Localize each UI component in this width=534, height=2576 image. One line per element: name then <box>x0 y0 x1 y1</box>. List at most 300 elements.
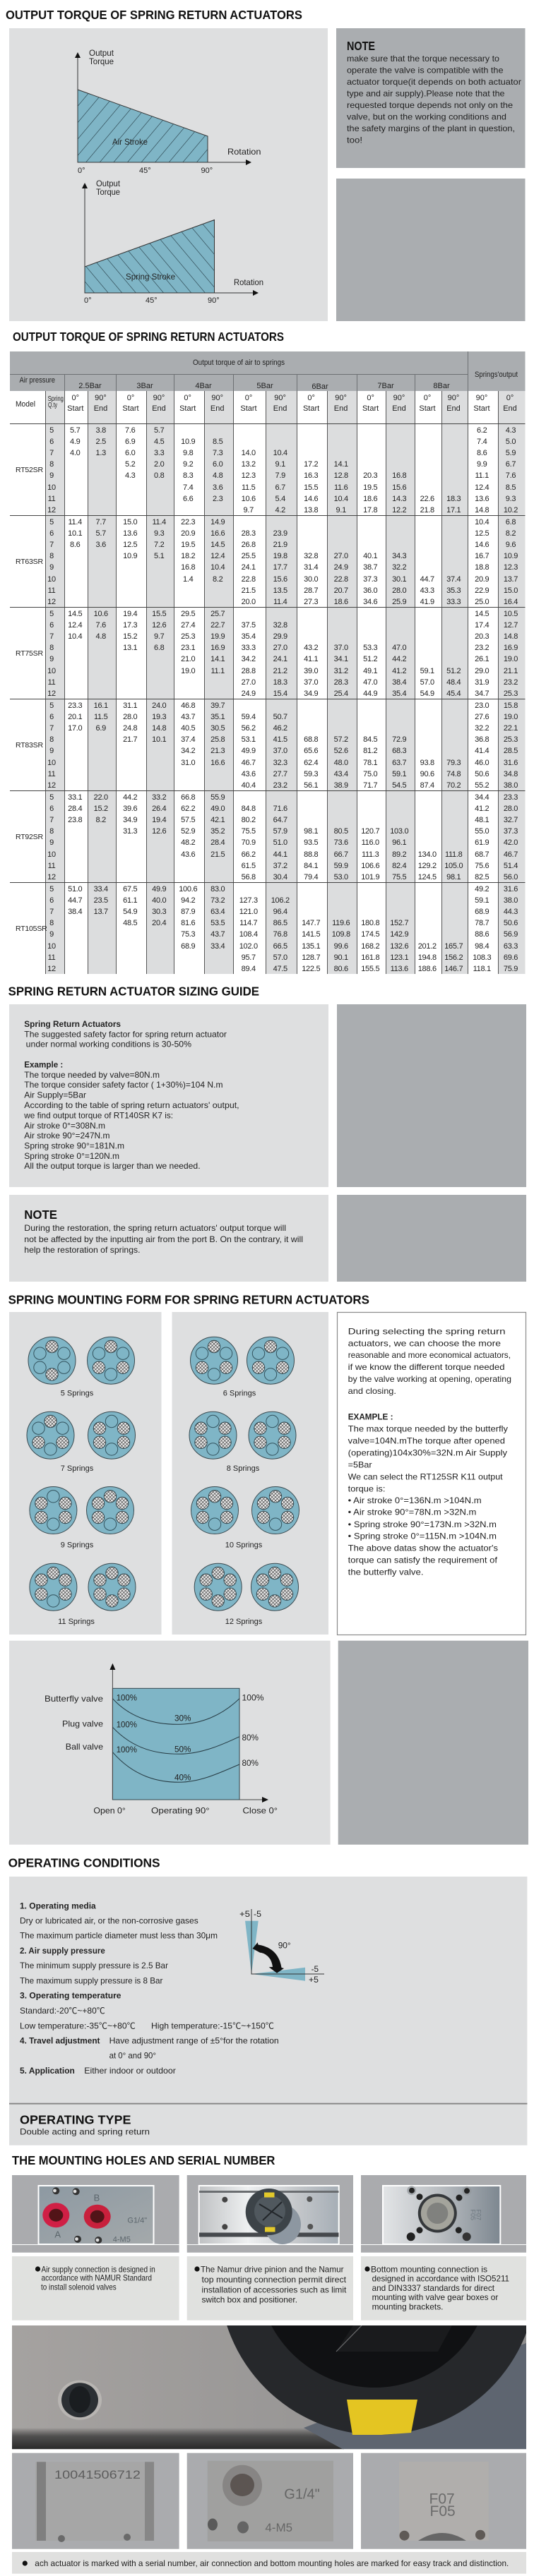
arrow: torque axis <box>112 1668 113 1800</box>
caption: bottom mounting connection <box>361 2256 526 2321</box>
caption: serial number note <box>12 2552 526 2574</box>
table rows: RT52SR: 6.2 <box>477 426 487 435</box>
table rows: RT83SR: 81.2 <box>363 747 377 755</box>
table rows: RT52SR: 9.7 <box>244 506 254 514</box>
table rows: RT52SR: 5.9 <box>506 449 516 457</box>
table rows: RT75SR: 17.3 <box>123 621 137 630</box>
table column captions: End <box>334 404 348 413</box>
table rows: RT63SR: 3.6 <box>96 541 106 549</box>
table rows: RT63SR: 8.6 <box>70 541 80 549</box>
table column captions: End <box>392 404 406 413</box>
table rows: RT92SR: 62.2 <box>181 805 195 813</box>
table rows: RT52SR: 7.4 <box>477 438 487 446</box>
table rows: RT92SR: 101.9 <box>361 873 379 881</box>
table rows: RT83SR: 70.2 <box>446 781 461 790</box>
table rows: RT52SR: 18.3 <box>446 495 461 503</box>
table rows: RT83SR: 23.0 <box>475 702 489 710</box>
table rows: RT75SR: 15.5 <box>152 610 166 618</box>
panel: valve selection text: the butterfly valve. <box>348 1567 424 1577</box>
table rows: RT92SR: 82.5 <box>475 873 489 881</box>
diagram: 6 springs <box>191 1337 294 1398</box>
table rows: RT75SR: 25.3 <box>504 690 518 698</box>
table rows: RT52SR: 20.3 <box>363 471 377 480</box>
table rows: RT63SR: 14.9 <box>210 518 225 526</box>
table rows: RT63SR: 9 <box>49 563 54 572</box>
table rows: RT52SR: 6.0 <box>125 449 135 457</box>
diagram: 8 springs <box>189 1412 296 1473</box>
table rows: RT92SR: 116.0 <box>362 838 379 847</box>
caption: serial number note: ach actuator is marked with a serial number, air connection and bottom mounting holes are marked for easy track and distinction. <box>35 2558 509 2568</box>
table rows: RT83SR: 37.0 <box>273 747 287 755</box>
table rows: RT63SR: 38.7 <box>363 563 377 572</box>
panel: sizing guide text: we find output torque of RT140SR K7 is: <box>23 1111 173 1121</box>
table rows: RT52SR: 18.6 <box>363 495 377 503</box>
table rows: RT63SR: 13.5 <box>273 586 287 595</box>
table rows: RT83SR: 25.8 <box>210 735 225 744</box>
table rows: RT105SR: 53.5 <box>210 919 225 927</box>
table rows: RT92SR: 57.5 <box>181 816 195 824</box>
table column captions: 0° <box>184 394 191 402</box>
table rows: RT92SR: 8 <box>49 827 54 836</box>
table rows: RT83SR: 63.7 <box>392 759 406 767</box>
panel: restoration note: help the restoration of springs. <box>24 1245 140 1255</box>
table rows: RT92SR: 64.7 <box>273 816 287 824</box>
table rows: RT75SR: 34.1 <box>334 655 348 663</box>
table rows: RT105SR: 127.3 <box>239 896 258 905</box>
table rows: RT52SR: 21.8 <box>420 506 434 514</box>
table rows: RT75SR: 48.4 <box>446 678 461 687</box>
table rows: RT83SR: 8 <box>49 735 54 744</box>
table rows: RT63SR: 12.4 <box>210 552 225 560</box>
diagram: 10 springs: 10 Springs <box>225 1541 263 1550</box>
table rows: RT92SR: 55.0 <box>475 827 489 836</box>
curve: butterfly valve <box>112 1699 239 1724</box>
table rows: RT83SR: 38.9 <box>334 781 348 790</box>
table rows: RT105SR: 108.3 <box>473 953 491 962</box>
table rows: RT105SR: 102.0 <box>239 942 258 951</box>
table rows: RT105SR: 118.1 <box>473 965 491 973</box>
table rows: RT52SR: 10.9 <box>181 438 195 446</box>
caption: namur drive pinion: switch box and positioner. <box>202 2295 297 2305</box>
table rows: RT92SR: 42.0 <box>504 838 518 847</box>
table rows: RT83SR: 23.3 <box>68 702 82 710</box>
panel: valve selection text: actuators, we can choose the more <box>348 1338 501 1348</box>
panel: note: valve, but on the working conditions and <box>347 112 506 121</box>
table rows: RT83SR: 39.7 <box>210 702 225 710</box>
table rows: RT63SR: 8 <box>49 552 54 560</box>
table rows: RT92SR: 106.6 <box>361 862 379 870</box>
table rows: RT92SR: 34.4 <box>475 793 489 802</box>
panel: valve selection text: torque is: <box>348 1483 385 1493</box>
table rows: RT92SR: 37.3 <box>504 827 518 836</box>
caption: namur drive pinion: top mounting connection permit direct <box>202 2275 347 2285</box>
table rows: RT92SR: 34.9 <box>123 816 137 824</box>
table rows: RT52SR: 16.3 <box>304 471 318 480</box>
table rows: RT83SR: 59.1 <box>392 770 406 778</box>
table rows: RT63SR: 32.2 <box>392 563 406 572</box>
table rows: RT92SR: 55.9 <box>210 793 225 802</box>
table rows: RT75SR: 17.4 <box>475 621 489 630</box>
table rows: RT83SR: 12 <box>47 781 56 790</box>
table rows: RT105SR: 83.0 <box>210 885 225 893</box>
table column captions: End <box>446 404 461 413</box>
panel: sizing guide text: Example : <box>24 1060 63 1070</box>
caption: bottom mounting connection: Bottom mounting connection is <box>371 2264 487 2274</box>
table rows: RT83SR: 6 <box>49 713 54 721</box>
caption: air supply connection <box>12 2256 179 2321</box>
table rows: RT52SR: 2.3 <box>213 495 222 503</box>
table rows: RT63SR: 23.9 <box>273 529 287 538</box>
table rows: RT63SR: 27.3 <box>304 598 318 606</box>
table rows: RT92SR: 33.2 <box>152 793 166 802</box>
table rows: RT83SR: 93.8 <box>420 759 434 767</box>
table rows: RT105SR: 10 <box>47 942 56 951</box>
table rows: RT83SR: 79.3 <box>446 759 461 767</box>
table rows: RT92SR: 82.4 <box>392 862 406 870</box>
table rows: RT63SR: 20.0 <box>242 598 256 606</box>
table rows: RT63SR: 44.7 <box>420 575 434 584</box>
table rows: RT92SR: 32.7 <box>504 816 518 824</box>
table rows: RT92SR: 30.4 <box>273 873 287 881</box>
text: operating type: OPERATING TYPE <box>20 2113 131 2127</box>
table rows: RT63SR: 24.1 <box>242 563 256 572</box>
panel: air connection mark photo <box>187 2453 353 2549</box>
table rows: RT75SR: 31.9 <box>475 678 489 687</box>
table rows: RT75SR: 57.0 <box>420 678 434 687</box>
table rows: RT105SR: 63.3 <box>504 942 518 951</box>
table rows: RT105SR: 100.6 <box>179 885 197 893</box>
table column captions: End <box>273 404 287 413</box>
table rows: RT92SR: RT92SR <box>16 833 43 841</box>
table rows: RT63SR: 13.7 <box>504 575 518 584</box>
panel: valve selection text: • Air stroke 90°=78N.m >32N.m <box>348 1507 476 1517</box>
table rows: RT75SR: 20.3 <box>475 632 489 641</box>
panel: valve selection text <box>338 1313 526 1635</box>
diagram: travel adjustment angle: -5 <box>254 1909 261 1919</box>
panel: note: the safety margins of the plant in question, <box>347 124 515 133</box>
table rows: RT52SR: 12.8 <box>334 471 348 480</box>
table rows: RT63SR: 22.8 <box>334 575 348 584</box>
table rows: RT52SR: 10.6 <box>242 495 256 503</box>
panel: bottom hole mark photo <box>361 2453 526 2549</box>
table rows: RT83SR: 46.2 <box>273 724 287 733</box>
table rows: RT63SR: 18.8 <box>475 563 489 572</box>
table rows: RT92SR: 10 <box>47 850 56 859</box>
table rows: RT92SR: 23.8 <box>68 816 82 824</box>
table rows: RT75SR: 5 <box>49 610 54 618</box>
table rows: RT83SR: 21.7 <box>123 735 137 744</box>
table rows: RT105SR: 99.6 <box>334 942 348 951</box>
table rows: RT92SR: 28.0 <box>504 805 518 813</box>
table rows: RT52SR: 2.0 <box>154 460 164 469</box>
table rows: RT63SR: 8.2 <box>213 575 222 584</box>
table rows: RT75SR: 15.4 <box>273 690 287 698</box>
table rows: RT83SR: 41.5 <box>273 735 287 744</box>
table rows: RT75SR: 49.1 <box>363 667 377 675</box>
table rows: RT52SR: 14.1 <box>334 460 348 469</box>
table rows: RT52SR: 9.1 <box>275 460 285 469</box>
table rows: RT92SR: 21.5 <box>210 850 225 859</box>
table rows: RT92SR: 66.7 <box>334 850 348 859</box>
diagram: travel adjustment angle <box>239 1909 324 1985</box>
panel: operating conditions: High temperature:-15℃~+150℃ <box>151 2021 274 2030</box>
table rows: RT75SR: 9.7 <box>154 632 164 641</box>
table rows: RT75SR: 10.6 <box>94 610 108 618</box>
table rows: RT63SR: 8.2 <box>506 529 516 538</box>
table rows: RT75SR: 44.9 <box>363 690 377 698</box>
panel: sizing guide text: Air stroke 0°=308N.m <box>24 1121 105 1131</box>
table column captions: Start <box>179 404 196 413</box>
table column captions: Start <box>473 404 490 413</box>
panel: valve selection text: =5Bar <box>348 1459 372 1469</box>
panel: operating conditions: The maximum supply pressure is 8 Bar <box>20 1975 162 1985</box>
table rows: RT105SR: 54.9 <box>123 908 137 916</box>
table rows: RT52SR: 9.3 <box>506 495 516 503</box>
table rows: RT52SR: 4.3 <box>125 471 135 480</box>
table rows: RT92SR: 103.0 <box>390 827 408 836</box>
table: header and column structure: 6Bar <box>312 383 328 391</box>
table rows: RT52SR: 7.6 <box>125 426 135 435</box>
table rows: RT92SR: 56.8 <box>242 873 256 881</box>
table rows: RT83SR: 40.5 <box>181 724 195 733</box>
table rows: RT75SR: 14.8 <box>504 632 518 641</box>
table: header and column structure: 8Bar <box>433 382 450 390</box>
table rows: RT92SR: 79.4 <box>304 873 318 881</box>
caption: air supply connection: to install solenoid valves <box>41 2282 117 2292</box>
panel: note: too! <box>347 136 362 145</box>
table rows: RT75SR: 43.2 <box>304 644 318 652</box>
table rows: RT105SR: 59.1 <box>475 896 489 905</box>
table rows: RT52SR: 1.3 <box>96 449 106 457</box>
table rows: RT75SR: 29.9 <box>273 632 287 641</box>
table rows: RT63SR: 34.3 <box>392 552 406 560</box>
panel: bottom mounting photo <box>361 2175 526 2253</box>
table rows: RT52SR: 5.7 <box>154 426 164 435</box>
table rows: RT75SR: 12 <box>47 690 56 698</box>
panel: operating conditions <box>9 1877 527 2145</box>
table rows: RT105SR: 119.6 <box>332 919 350 927</box>
table rows: RT105SR: 40.0 <box>152 896 166 905</box>
table rows: RT63SR: 10 <box>47 575 56 584</box>
table rows: RT105SR: 47.5 <box>273 965 287 973</box>
table rows: RT105SR: 68.9 <box>181 942 195 951</box>
diagram: travel adjustment angle: -5 <box>312 1964 319 1974</box>
table rows: RT52SR: 9 <box>49 471 54 480</box>
panel: valve torque chart: 80% <box>242 1758 259 1768</box>
panel: operating conditions: 4. Travel adjustment <box>20 2036 100 2046</box>
chart: air stroke: 0° <box>78 167 85 175</box>
table rows: RT63SR: 16.7 <box>475 552 489 560</box>
table rows: RT63SR: 34.6 <box>363 598 377 606</box>
table rows: RT83SR: 54.5 <box>392 781 406 790</box>
table rows: RT83SR: 6.9 <box>96 724 106 733</box>
table rows: RT105SR: 161.8 <box>361 953 379 962</box>
table rows: RT75SR: 41.2 <box>392 667 406 675</box>
table rows: RT75SR: 27.0 <box>242 678 256 687</box>
table: header and column structure: 7Bar <box>377 382 394 390</box>
table rows: RT105SR: 80.6 <box>334 965 348 973</box>
table rows: RT92SR: 80.5 <box>334 827 348 836</box>
table rows: RT105SR: 109.8 <box>332 930 350 939</box>
table rows: RT92SR: 7 <box>49 816 54 824</box>
table rows: RT52SR: 15.5 <box>304 483 318 492</box>
table rows: RT63SR: 5.1 <box>154 552 164 560</box>
table rows: RT75SR: 37.0 <box>334 644 348 652</box>
diagram: 5 springs: 5 Springs <box>61 1390 94 1398</box>
table rows: RT105SR: 94.2 <box>181 896 195 905</box>
table rows: RT52SR: 7.3 <box>213 449 222 457</box>
panel: note: type and air supply).Please note that the <box>347 89 505 99</box>
table column captions <box>67 394 517 413</box>
panel: spring diagrams middle column <box>172 1312 328 1635</box>
chart: spring stroke: Spring Stroke <box>126 272 175 282</box>
table rows: RT83SR: 72.9 <box>392 735 406 744</box>
table rows: RT75SR: 12.7 <box>504 621 518 630</box>
heading: output torque table: OUTPUT TORQUE OF SPRING RETURN ACTUATORS <box>13 330 284 344</box>
chart: air stroke <box>64 48 261 175</box>
table rows: RT63SR: 19.5 <box>181 541 195 549</box>
table rows: RT63SR: 12.5 <box>123 541 137 549</box>
chart: air stroke: Rotation <box>227 147 261 157</box>
table rows: RT105SR: 132.6 <box>390 942 408 951</box>
chart: spring stroke <box>71 179 263 305</box>
table rows: RT92SR: 26.4 <box>152 805 166 813</box>
table rows: RT83SR: 28.5 <box>504 747 518 755</box>
panel: valve torque chart: Operating 90° <box>151 1806 210 1816</box>
table rows: RT105SR: 31.6 <box>504 885 518 893</box>
table column captions: 90° <box>153 394 165 402</box>
table rows: RT75SR: 27.4 <box>181 621 195 630</box>
table rows: RT92SR: 39.6 <box>123 805 137 813</box>
table rows: RT83SR: 9 <box>49 747 54 755</box>
panel: valve selection text: torque can satisfy the requirement of <box>348 1555 498 1565</box>
diagram: travel adjustment angle: +5 <box>309 1975 319 1985</box>
panel: restoration note: During the restoration, the spring return actuators' output torque will <box>24 1223 286 1233</box>
table rows: RT83SR: 22.1 <box>504 724 518 733</box>
table rows: RT63SR: 9.6 <box>506 541 516 549</box>
table rows: RT83SR: 37.4 <box>181 735 195 744</box>
table rows: RT52SR: 10.4 <box>273 449 287 457</box>
table rows: RT83SR: 46.8 <box>181 702 195 710</box>
chart: spring stroke: Torque <box>96 187 120 197</box>
panel: bottom hole mark photo: F05 <box>430 2503 456 2520</box>
panel: valve selection text: if we know the different torque needed <box>348 1362 504 1372</box>
table rows: RT83SR: 55.2 <box>475 781 489 790</box>
panel: operating conditions: 3. Operating temperature <box>20 1991 121 2001</box>
table rows: RT63SR: 14.5 <box>210 541 225 549</box>
diagram: 9 springs <box>30 1486 134 1550</box>
table rows: RT83SR: 16.1 <box>94 702 108 710</box>
table rows: RT105SR: 122.5 <box>302 965 320 973</box>
table rows: RT52SR: 8.5 <box>506 483 516 492</box>
table rows: RT52SR: 14.3 <box>392 495 406 503</box>
table rows: RT75SR: 37.0 <box>304 678 318 687</box>
table rows: RT83SR: 30.5 <box>210 724 225 733</box>
panel: namur pinion photo <box>187 2175 353 2253</box>
table rows: RT63SR: RT63SR <box>16 558 43 566</box>
table rows: RT63SR: 33.3 <box>446 598 461 606</box>
table rows: RT83SR: 11.5 <box>94 713 107 721</box>
table rows: RT75SR: 25.7 <box>210 610 225 618</box>
table column captions: Start <box>419 404 436 413</box>
table rows: RT63SR: 37.4 <box>446 575 461 584</box>
table rows: RT75SR: 44.2 <box>392 655 406 663</box>
table rows: RT63SR: 22.8 <box>242 575 256 584</box>
table rows: RT92SR: 105.0 <box>444 862 463 870</box>
table rows: RT83SR: 74.8 <box>446 770 461 778</box>
table rows: RT52SR: 8.3 <box>183 471 193 480</box>
chart: air stroke: Output <box>89 48 114 58</box>
table rows: RT75SR: 19.0 <box>504 655 518 663</box>
caption: bottom mounting connection: designed in accordance with ISO5211 <box>372 2274 509 2284</box>
table rows: RT105SR: 123.1 <box>390 953 408 962</box>
panel: sizing guide text: Spring stroke 90°=181N.m <box>24 1141 124 1151</box>
photo: close-up of knob and mounting hole <box>12 2325 526 2449</box>
table rows: RT83SR: 52.6 <box>334 747 348 755</box>
heading: mounting holes and serial number: THE MOUNTING HOLES AND SERIAL NUMBER <box>12 2153 275 2167</box>
table rows: RT52SR: 0.8 <box>154 471 164 480</box>
table rows: RT75SR: 41.1 <box>304 655 318 663</box>
table rows: RT83SR: 17.0 <box>68 724 82 733</box>
table rows: RT83SR: 59.3 <box>304 770 318 778</box>
table column captions: Start <box>240 404 257 413</box>
table rows: RT83SR: 31.6 <box>504 759 518 767</box>
table rows: RT92SR: 96.1 <box>392 838 406 847</box>
table rows: RT105SR: 63.4 <box>210 908 225 916</box>
table rows: RT83SR: 48.0 <box>334 759 348 767</box>
table rows: RT105SR: 20.4 <box>152 919 166 927</box>
table rows: RT75SR: 25.4 <box>334 690 348 698</box>
table rows: RT83SR: 19.0 <box>504 713 518 721</box>
panel: serial number photo <box>12 2453 179 2549</box>
table rows: RT83SR <box>16 702 518 790</box>
table rows: RT105SR: 68.9 <box>475 908 489 916</box>
table rows: RT92SR: 12.6 <box>152 827 166 836</box>
table rows: RT92SR: 71.6 <box>273 805 287 813</box>
panel: sizing guide text: Spring stroke 0°=120N.m <box>24 1151 119 1161</box>
table rows: RT75SR: 47.0 <box>363 678 377 687</box>
arrow: rotation axis <box>239 1799 263 1800</box>
table rows: RT75SR: 16.9 <box>504 644 518 652</box>
panel: bottom mounting photo: F05 <box>469 2210 476 2220</box>
table rows: RT75SR: 21.1 <box>504 667 518 675</box>
table rows: RT83SR: 56.2 <box>242 724 256 733</box>
table rows: RT63SR: 14.6 <box>475 541 489 549</box>
table rows: RT52SR: 5.4 <box>275 495 285 503</box>
table rows: RT75SR: 35.4 <box>392 690 406 698</box>
panel: sizing guide text: The suggested safety factor for spring return actuator <box>24 1029 227 1039</box>
table rows: RT75SR: 16.9 <box>210 644 225 652</box>
panel: valve torque chart: Ball valve <box>66 1742 103 1752</box>
table rows: RT63SR: 36.0 <box>363 586 377 595</box>
diagram: 6 springs: 6 Springs <box>223 1390 256 1398</box>
table column captions: 90° <box>393 394 405 402</box>
table rows: RT75SR: 12.6 <box>152 621 166 630</box>
table rows: RT75SR: 19.9 <box>210 632 225 641</box>
table column captions: 0° <box>127 394 134 402</box>
table rows: RT83SR: 90.6 <box>420 770 434 778</box>
table rows: RT92SR: 68.7 <box>475 850 489 859</box>
table rows: RT92SR: 37.2 <box>273 862 287 870</box>
table rows: RT92SR: 124.5 <box>418 873 437 881</box>
table rows: RT83SR: 20.1 <box>68 713 82 721</box>
table rows: RT83SR: 41.4 <box>475 747 489 755</box>
table rows: RT92SR: 59.9 <box>334 862 348 870</box>
panel: bottom hole mark photo: F07 <box>429 2491 455 2507</box>
table: header and column structure: 5Bar <box>256 382 273 390</box>
table rows: RT83SR: 10 <box>47 759 56 767</box>
diagram: 12 springs <box>194 1563 298 1626</box>
